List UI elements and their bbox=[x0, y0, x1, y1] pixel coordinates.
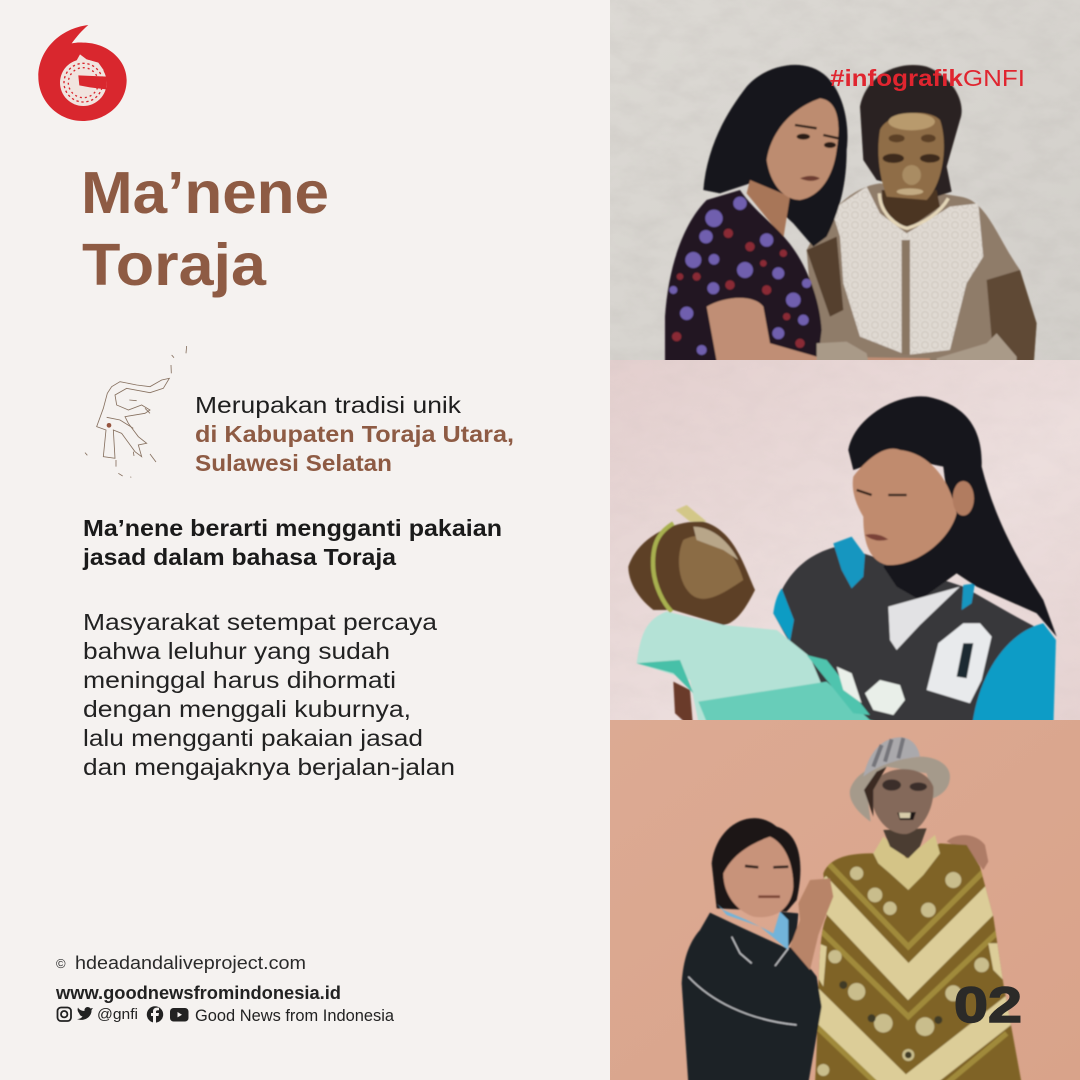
mint dress bbox=[637, 612, 873, 730]
photo 3: woman beside mummy in batik shirt bbox=[610, 720, 1080, 1080]
text block: description: bahwa leluhur yang sudah bbox=[83, 638, 390, 664]
text block: location: Sulawesi Selatan bbox=[195, 450, 392, 476]
woman arm bbox=[707, 298, 930, 370]
black jacket bbox=[682, 913, 822, 1080]
website url: www.goodnewsfromindonesia.id bbox=[55, 983, 341, 1003]
icon: Sulawesi map bbox=[85, 346, 187, 478]
woman hair bbox=[712, 818, 800, 912]
mummy neck bbox=[883, 828, 927, 858]
pearl necklace bbox=[879, 193, 948, 228]
blue collar bbox=[717, 903, 788, 950]
icon: instagram bbox=[58, 1008, 71, 1021]
right blue sleeve bbox=[972, 623, 1056, 730]
text block: meaning: jasad dalam bahasa Toraja bbox=[82, 544, 396, 570]
left blue sleeve bbox=[773, 588, 794, 642]
floral shirt bbox=[665, 190, 822, 370]
mummy dress bbox=[807, 183, 1037, 370]
text block: description bbox=[83, 609, 455, 780]
woman face bbox=[767, 98, 838, 200]
icon: twitter bbox=[77, 1007, 93, 1020]
channel name: Good News from Indonesia bbox=[195, 1006, 395, 1025]
photo 2: woman holding child mummy bbox=[610, 360, 1080, 730]
batik motifs bbox=[817, 867, 989, 1076]
collar bbox=[873, 835, 940, 890]
logo: GNFI red swirl with garuda bbox=[38, 25, 127, 121]
mummy face bbox=[878, 113, 944, 200]
text block: description: dan mengajaknya berjalan-jalan bbox=[83, 754, 455, 780]
text block: description: meninggal harus dihormati bbox=[83, 667, 396, 693]
photo credit: © bbox=[56, 956, 66, 971]
mummy hair bbox=[860, 65, 962, 197]
photo credit: hdeadandaliveproject.com bbox=[75, 953, 306, 973]
title: Ma’nene bbox=[81, 160, 329, 226]
hair bbox=[848, 396, 1057, 637]
woman hair bbox=[703, 65, 847, 247]
text block: meaning bbox=[82, 515, 502, 570]
hashtag: #infografik GNFI bbox=[830, 65, 1025, 91]
title bbox=[81, 160, 329, 298]
head band and bow bbox=[653, 523, 673, 612]
child mummy head bbox=[628, 522, 755, 625]
woman face bbox=[723, 837, 793, 917]
white flowers bbox=[837, 667, 905, 715]
title: Toraja bbox=[82, 232, 267, 298]
text block: location: di Kabupaten Toraja Utara, bbox=[195, 421, 514, 447]
photo 1: woman beside mummy in lace dress bbox=[610, 0, 1080, 370]
handle: @gnfi bbox=[97, 1006, 138, 1023]
text block: description: lalu mengganti pakaian jasad bbox=[83, 725, 423, 751]
mummy neck bbox=[882, 190, 940, 230]
child hand bbox=[673, 682, 693, 730]
page number: 02 bbox=[954, 977, 1022, 1033]
social media row bbox=[58, 1006, 395, 1025]
mummy arm hand bbox=[947, 835, 988, 870]
blue hood bbox=[833, 537, 865, 588]
batik shirt bbox=[814, 842, 1022, 1080]
icon: facebook bbox=[147, 1006, 163, 1023]
woman neck bbox=[747, 180, 790, 238]
map location marker bbox=[107, 423, 111, 428]
text block: description: dengan menggali kuburnya, bbox=[83, 696, 411, 722]
batik chevron bands bbox=[807, 883, 1013, 1080]
text block: location: Merupakan tradisi unik bbox=[195, 392, 462, 418]
icon: youtube bbox=[170, 1008, 188, 1022]
text block: description: Masyarakat setempat percaya bbox=[83, 609, 437, 635]
face bbox=[853, 449, 957, 565]
hat brim bbox=[850, 757, 950, 822]
varsity letter bbox=[927, 623, 992, 703]
text block: meaning: Ma’nene berarti mengganti pakaian bbox=[83, 515, 502, 541]
lace bodice bbox=[832, 187, 983, 355]
text block: location bbox=[195, 392, 514, 476]
woman arm and hand bbox=[790, 878, 833, 970]
t-shirt bbox=[888, 587, 960, 650]
mummy head bbox=[870, 769, 933, 834]
hat crown bbox=[863, 737, 920, 777]
dark jacket bbox=[773, 547, 1053, 730]
mummy hand lace cuff bbox=[817, 333, 1017, 370]
